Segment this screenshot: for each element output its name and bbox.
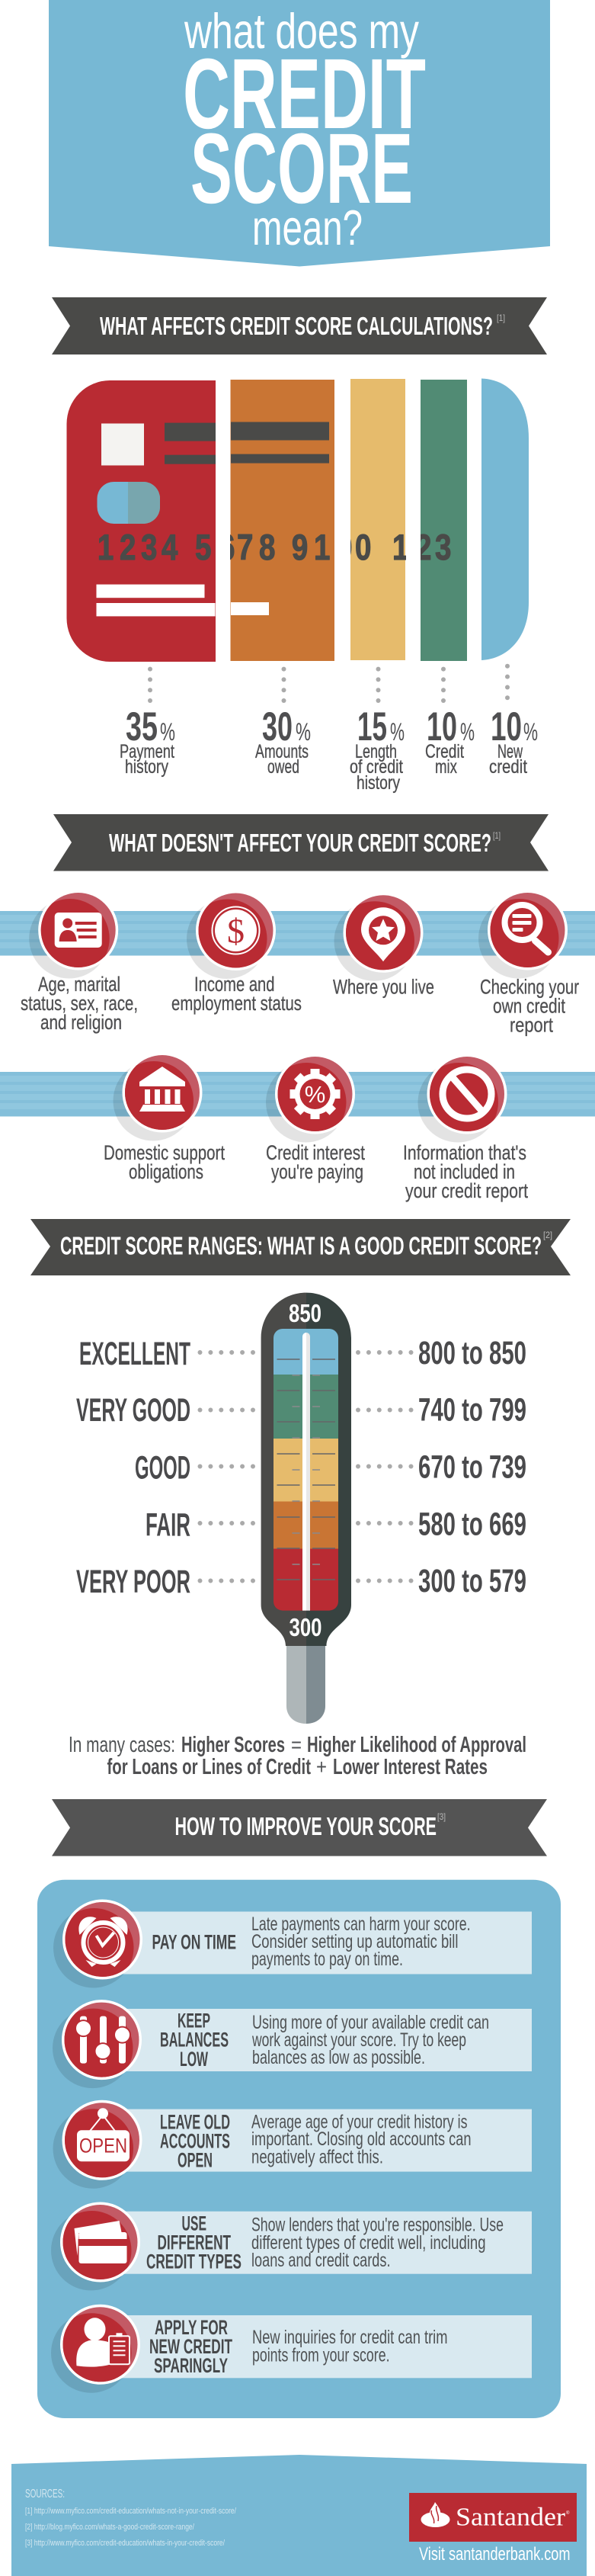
rating ranges bbox=[418, 1336, 526, 1599]
tip title: NEW CREDIT bbox=[149, 2335, 232, 2358]
label: 10% new credit: 10 bbox=[491, 704, 522, 749]
gauge note: Higher Scores bbox=[181, 1733, 285, 1757]
item: information not included bbox=[403, 1054, 528, 1202]
item text bbox=[266, 1141, 365, 1183]
badge icon: open sign: OPEN bbox=[79, 2134, 127, 2157]
item text: Income and bbox=[194, 973, 274, 996]
item text: report bbox=[510, 1014, 553, 1037]
segment: credit mix bbox=[421, 380, 467, 661]
card magnetic bars bbox=[165, 422, 329, 464]
tip text: balances as low as possible. bbox=[252, 2047, 425, 2068]
banner: what affects bbox=[52, 297, 547, 354]
tick marks bbox=[277, 1359, 335, 1580]
segment: new credit bbox=[481, 378, 529, 660]
label: 35% payment history: 35 bbox=[126, 704, 158, 749]
banner: credit score ranges bbox=[30, 1219, 571, 1275]
tip text: loans and credit cards. bbox=[251, 2250, 390, 2271]
tip title bbox=[146, 2212, 242, 2273]
title bbox=[183, 3, 426, 255]
badge icon: gear percent bbox=[266, 1054, 355, 1142]
gauge max: 850 bbox=[289, 1300, 321, 1328]
header panel bbox=[49, 0, 550, 267]
card hologram bbox=[101, 424, 144, 465]
card number: 123456789100123 bbox=[98, 528, 451, 568]
rating ranges: 740 to 799 bbox=[418, 1392, 526, 1429]
sources: [3] http://www.myfico.com/credit-education/whats-in-your-credit-score/ bbox=[25, 2539, 226, 2548]
tip title bbox=[160, 2111, 230, 2172]
label: 15% length of credit history: 15 bbox=[357, 704, 387, 749]
tip text bbox=[252, 2327, 448, 2366]
badge icon: person with clipboard bbox=[51, 2305, 140, 2393]
banner: how to improve bbox=[52, 1799, 547, 1856]
label: 15% length of credit history: Length bbox=[355, 741, 397, 762]
sources bbox=[25, 2488, 237, 2548]
banner: what doesn't affect bbox=[53, 814, 549, 871]
title: mean? bbox=[252, 200, 363, 255]
title: what does my bbox=[184, 3, 419, 59]
tip title: CREDIT TYPES bbox=[146, 2250, 242, 2273]
item text: Where you live bbox=[333, 976, 434, 999]
item text bbox=[480, 976, 579, 1037]
badge icon: dollar: $ bbox=[227, 912, 245, 950]
mercury tube bbox=[302, 1333, 310, 1611]
label: 15% length of credit history: history bbox=[357, 772, 400, 794]
tip title bbox=[149, 2316, 232, 2377]
item text: Domestic support bbox=[104, 1141, 225, 1164]
label: 10% credit mix: Credit bbox=[425, 741, 464, 762]
item: domestic support bbox=[104, 1052, 225, 1183]
credit card chart bbox=[67, 378, 529, 662]
tip: use different credit types bbox=[51, 2202, 532, 2290]
tip: keep balances low bbox=[53, 2000, 532, 2088]
rating labels: FAIR bbox=[146, 1508, 190, 1543]
tip text bbox=[251, 1914, 471, 1970]
label: 35% payment history: history bbox=[125, 756, 168, 778]
banner: what doesn't affect: [1] bbox=[493, 830, 501, 841]
badge icon: credit cards bbox=[51, 2202, 140, 2290]
rating ranges: 300 to 579 bbox=[418, 1564, 526, 1599]
tip: apply for new credit sparingly bbox=[51, 2305, 532, 2393]
tip text: different types of credit well, including bbox=[251, 2232, 486, 2254]
badge icon: sliders bbox=[53, 2000, 142, 2088]
label: 10% new credit bbox=[489, 704, 538, 778]
label: 30% amounts owed: Amounts bbox=[255, 741, 309, 762]
tip text: New inquiries for credit can trim bbox=[252, 2327, 448, 2348]
gauge note: In many cases: bbox=[69, 1733, 175, 1757]
label: 35% payment history bbox=[120, 704, 175, 778]
badge icon: gear percent: % bbox=[305, 1081, 325, 1108]
banner: credit score ranges: [2] bbox=[543, 1230, 552, 1240]
gauge note bbox=[69, 1733, 526, 1779]
rating ranges: 580 to 669 bbox=[418, 1506, 526, 1543]
rating labels bbox=[76, 1336, 190, 1600]
gauge note: + bbox=[316, 1755, 327, 1779]
label: 30% amounts owed: 30 bbox=[262, 704, 293, 749]
label: 30% amounts owed: owed bbox=[267, 756, 299, 778]
badge icon: map pin bbox=[334, 893, 424, 981]
item text: obligations bbox=[129, 1160, 203, 1183]
segment: amounts owed bbox=[230, 380, 334, 661]
item text bbox=[21, 973, 138, 1034]
item text: you're paying bbox=[271, 1160, 363, 1183]
rating labels: EXCELLENT bbox=[79, 1336, 190, 1372]
tip title: LOW bbox=[180, 2048, 208, 2071]
label: 10% new credit: New bbox=[497, 741, 523, 762]
tip title: APPLY FOR bbox=[155, 2316, 228, 2339]
badge icon: magnifier bbox=[478, 890, 568, 979]
label: 10% credit mix: % bbox=[460, 718, 475, 746]
thermometer handle bbox=[286, 1643, 325, 1724]
banner: what affects: [1] bbox=[497, 313, 505, 323]
tip text: payments to pay on time. bbox=[251, 1949, 403, 1970]
gauge dotted leaders bbox=[200, 1352, 412, 1581]
item text: status, sex, race, bbox=[21, 992, 138, 1015]
tip text: Late payments can harm your score. bbox=[251, 1914, 471, 1935]
card chip bbox=[98, 482, 160, 524]
panel: how to improve bbox=[37, 1880, 561, 2418]
rating ranges: 670 to 739 bbox=[418, 1450, 526, 1485]
tip title: OPEN bbox=[178, 2149, 213, 2172]
label: 35% payment history: Payment bbox=[120, 741, 174, 762]
item: income bbox=[171, 890, 302, 1015]
footer panel bbox=[11, 2455, 587, 2576]
score bands bbox=[274, 1329, 338, 1611]
tip title bbox=[160, 2010, 229, 2071]
badge icon: bank bbox=[113, 1052, 203, 1140]
tip title: SPARINGLY bbox=[154, 2354, 228, 2377]
badge icon: dollar bbox=[187, 890, 276, 979]
tip text: Consider setting up automatic bill bbox=[251, 1931, 459, 1952]
label: 35% payment history: % bbox=[160, 718, 175, 746]
gauge min: 300 bbox=[290, 1614, 321, 1642]
tip title: LEAVE OLD bbox=[160, 2111, 230, 2134]
item: checking your own credit report bbox=[478, 890, 579, 1037]
label: 10% new credit: credit bbox=[489, 756, 527, 778]
item text: Credit interest bbox=[266, 1141, 365, 1164]
banner: how to improve: [3] bbox=[437, 1811, 446, 1822]
striped band row 2 bbox=[0, 1072, 595, 1116]
tip text: work against your score. Try to keep bbox=[251, 2029, 466, 2051]
banner: how to improve: HOW TO IMPROVE YOUR SCORE bbox=[175, 1812, 437, 1840]
item text: own credit bbox=[493, 994, 565, 1017]
item: credit interest bbox=[266, 1054, 365, 1183]
badge icon: prohibited bbox=[417, 1054, 507, 1142]
logo: santander: Santander bbox=[456, 2504, 566, 2531]
gauge note: for Loans or Lines of Credit bbox=[107, 1755, 311, 1779]
logo: santander bbox=[409, 2493, 577, 2542]
item text: not included in bbox=[414, 1160, 515, 1183]
tip text bbox=[251, 2012, 489, 2068]
gauge note: Lower Interest Rates bbox=[333, 1755, 488, 1779]
item text bbox=[171, 973, 302, 1015]
label: 15% length of credit history bbox=[350, 704, 405, 794]
badge icon: id card bbox=[29, 890, 118, 979]
sources: [2] http://blog.myfico.com/whats-a-good-credit-score-range/ bbox=[25, 2523, 195, 2532]
tip text: important. Closing old accounts can bbox=[251, 2128, 471, 2150]
tip text: Using more of your available credit can bbox=[252, 2012, 489, 2033]
tip title: DIFFERENT bbox=[157, 2231, 231, 2254]
logo: santander: ® bbox=[566, 2510, 570, 2516]
badge icon: open sign bbox=[53, 2100, 142, 2189]
title: SCORE bbox=[190, 112, 413, 224]
label: 15% length of credit history: of credit bbox=[350, 756, 403, 778]
label: 30% amounts owed: % bbox=[296, 718, 311, 746]
tip: leave old accounts open bbox=[53, 2100, 532, 2189]
tip text: negatively affect this. bbox=[251, 2146, 383, 2167]
item text: employment status bbox=[171, 992, 302, 1015]
tip title: USE bbox=[181, 2212, 206, 2235]
thermometer gauge bbox=[261, 1293, 351, 1724]
label: 10% credit mix: mix bbox=[435, 756, 457, 778]
logo flame bbox=[421, 2502, 449, 2527]
sources: SOURCES: bbox=[25, 2488, 65, 2501]
rating labels: GOOD bbox=[135, 1450, 190, 1487]
sources: [1] http://www.myfico.com/credit-education/whats-not-in-your-credit-score/ bbox=[25, 2507, 237, 2516]
striped band row 1 bbox=[0, 911, 595, 956]
rating labels: VERY POOR bbox=[76, 1564, 190, 1600]
thermometer body bbox=[261, 1293, 351, 1646]
item: age, marital status bbox=[21, 890, 138, 1034]
item text: and religion bbox=[40, 1011, 122, 1034]
card signature bars bbox=[96, 585, 269, 616]
rating ranges: 800 to 850 bbox=[418, 1336, 526, 1371]
item text bbox=[104, 1141, 225, 1183]
title: CREDIT bbox=[183, 37, 426, 149]
tip title: PAY ON TIME bbox=[152, 1931, 236, 1954]
tip title: KEEP bbox=[178, 2010, 210, 2032]
tip title: BALANCES bbox=[160, 2028, 229, 2051]
item text bbox=[403, 1141, 528, 1202]
item text: your credit report bbox=[405, 1179, 528, 1202]
tip text bbox=[251, 2215, 504, 2271]
tip text bbox=[251, 2112, 471, 2167]
tip text: Average age of your credit history is bbox=[251, 2112, 468, 2133]
item text: Information that's bbox=[403, 1141, 526, 1164]
segment: length of history bbox=[350, 379, 405, 660]
gauge note: = bbox=[291, 1733, 302, 1756]
dotted leader lines bbox=[148, 664, 510, 703]
label: 15% length of credit history: % bbox=[390, 718, 405, 746]
badge icon: alarm clock bbox=[53, 1900, 142, 1988]
label: 30% amounts owed bbox=[255, 704, 311, 778]
label: 10% credit mix: 10 bbox=[427, 704, 457, 749]
tip text: points from your score. bbox=[252, 2344, 390, 2366]
tip: pay on time bbox=[53, 1900, 532, 1988]
segment: payment history bbox=[67, 380, 216, 662]
tip title: ACCOUNTS bbox=[160, 2130, 230, 2153]
label: 10% new credit: % bbox=[523, 718, 538, 746]
item text: Age, marital bbox=[38, 973, 120, 996]
item: where you live bbox=[333, 893, 434, 999]
label: 10% credit mix bbox=[425, 704, 475, 778]
rating labels: VERY GOOD bbox=[76, 1393, 190, 1429]
